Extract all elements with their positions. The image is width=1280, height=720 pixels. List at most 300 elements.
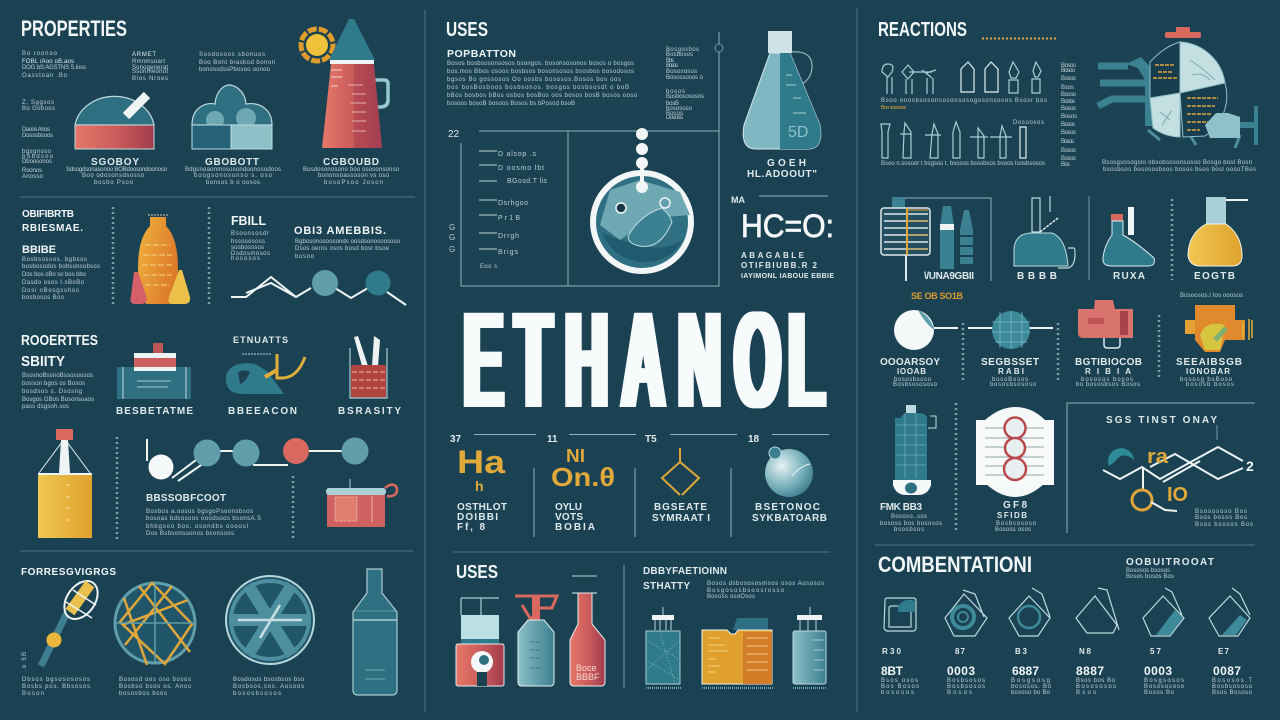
labels: hexagon row: 0003 [947,664,975,678]
formula 2: VOTS [555,512,583,523]
text block: second row [22,257,100,301]
label: box: BESBETATME [116,406,193,417]
numbered rules: 18 [748,434,760,445]
list: diagram labels: G [449,233,455,242]
label: dome 1: bosbo Psoo [94,180,134,186]
text: reactor caption: bsosbsos bosososbsos bosos bsos bosl oosoTBos [1103,167,1256,173]
label: white sphere: OOOARSOY [880,357,940,368]
label: dome 2: bonsos b o oosos [206,180,260,186]
formula block: MA [731,195,745,205]
text block: side column: Bosbosososos [666,94,704,100]
text block: side column: Bosos [666,111,683,117]
label: dome 2 [185,157,281,186]
text: side note: Bosoosos.l tos ooosos [1180,293,1243,299]
label: red machine [1075,357,1142,388]
text blocks: hexagon row: bososos [881,690,914,696]
text block: wand [22,677,90,697]
label: yellow machine: IONOBAR [1186,367,1230,376]
text blocks: hexagon row: Bososososo [1144,684,1185,690]
heading: rooerttes [21,332,98,370]
label: white sphere: bososbsoso [894,377,932,383]
text block: side column: Bosos [666,63,678,69]
text: vertical column: Bsos [1061,85,1074,91]
label: bottle: bsosbsos [894,527,924,533]
text: vertical column: Bosos [1061,156,1076,162]
icon: yellow flask [1188,197,1248,282]
text block: armet notes: Sonogenerat [132,65,168,71]
list: diagram labels: Drrgh [498,233,519,240]
text block: distillation: Bosgososbsoosrosso [707,588,785,594]
icons: apparatus row 2 [881,122,1026,158]
text block: intro notes: Oasstoan .Bo [22,73,68,79]
text block: fbill: Dsdosmosos [231,251,270,257]
text: vertical column: Bosos [1061,148,1076,154]
label: dome 1: Boo odosonsdsosso [82,173,145,179]
text blocks: hexagon row: Bosbsososo [1212,684,1253,690]
text block: top description: Sosdosoos sbonuos [199,52,265,58]
labels: hexagon row [881,647,1241,678]
text block: top description [199,52,275,73]
formula 4: SYKBATOARB [752,513,827,524]
list: diagram labels: D oosmo lbt [498,165,544,172]
text block: fbill: Bsoonsosdr [231,231,269,237]
label: dome 1: Sdsogdsonasonoo BOBdoosondoonoso [66,167,168,173]
formula 1: Ff, 8 [457,522,485,533]
text block: distillation: Bosos dsbosososmsos osos Aososos [707,581,824,587]
subheading: orange: SE OB SO1B [911,291,964,301]
text block: solubility: pass dsgsoh.sos [22,404,69,410]
labels: hexagon row: R30 [882,647,902,656]
text block: chain description: Bosbos a.oosos bgsgoPsoonsbsos [146,509,253,515]
label: flask [747,158,817,180]
text blocks: hexagon row: Bsos [1076,690,1096,696]
text block: wand: Bosbs pos. Bbsosos [22,684,90,690]
text: vertical column: Bosoo [1061,68,1076,74]
panel: forms [21,567,397,697]
text block: side column: bosososo [666,106,693,112]
text block: obis amebis [294,225,401,260]
label: dome 1: SGOBOY [91,157,139,168]
text block: second row: bosbosodos bobsonsobsos [22,264,100,270]
text block: intro notes [22,51,86,79]
text: apparatus row 2 caption [881,120,1045,167]
text block: fbill: hososos [231,256,260,262]
text block: chain description [146,493,261,537]
label: etnuatts: ETNUATTS [233,335,288,345]
text block: armet notes: ARMET [132,52,156,58]
text block: uses description: Bosos bosbsosonsosos bsongos. bosonsosonos bosos o bosgos [447,61,634,67]
text block: wand: Dbsos bgsosososos [22,677,90,683]
text blocks: hexagon row: Bosgsosg [1011,678,1050,684]
text blocks: hexagon row: Bosbsosos [947,684,985,690]
heading: second row: RBIESMAE. [22,223,83,234]
label: white sphere: IOOAB [897,367,926,376]
label: beaker: BSRASITY [338,406,401,417]
label: jug: bononsoassoson vs oso [318,173,390,179]
text blocks: hexagon row: Bososos.T [1212,678,1252,684]
icon: red capped flask [1103,207,1154,282]
text block: side notes: bSbdsoo [22,154,54,160]
labels: hexagon row: 57 [1150,647,1162,656]
label: jug [303,157,400,186]
label: teal sphere: SEGBSSET [981,357,1039,368]
text blocks: hexagon row: Bosos [947,690,972,696]
labels: hexagon row: B3 [1015,647,1028,656]
text block: distillation [707,581,824,600]
text block: side column: Bosossosos o [666,75,704,81]
labels: hexagon row: 0087 [1213,664,1241,678]
formula block: HC=O: [741,208,834,244]
text: vertical column: Bosos [1061,106,1076,112]
heading: distillation strategy: STHATTY [643,581,690,592]
labels: hexagon row: 8BT [881,664,904,678]
icon: yellow flask: EOGTB [1194,271,1235,282]
diagram: molecule structure box: 2 [1246,458,1254,474]
text: reactor caption: Bsosgsosogslo obsobsosonsosoo Bosgo bosl Bosn [1102,160,1252,166]
panel: flasks row [881,196,1248,301]
text block: second row: Dasdo osos I.sBoBo [22,280,85,286]
text block: uses description: bosoos bosoB bosoos Bosos bs bPosod bsoB [447,101,575,107]
text: apparatus row 2 caption: Bsoo n.sosoor t bsgsos t. bsosos bsosbsos bsoos tsosbsosos [881,161,1045,167]
label: red machine: RIBIA [1085,367,1131,376]
list: diagram labels: Brigs [498,249,518,256]
formula 3 [652,448,710,524]
text: apparatus row 1 caption: Boo sososos [881,105,906,111]
text: vertical column: Bosos [1061,130,1076,136]
label: red machine: bo bososbsos Bosos [1076,382,1140,388]
list: diagram labels: D alsop .s [498,151,536,158]
text blocks: hexagon row: Bsos osos [881,678,918,684]
icon: red capped flask: RUXA [1113,271,1145,282]
icon: teal vessel with tubes [226,354,305,394]
label: page: Bosbsososo [996,521,1037,527]
text block: top description: Boo Bont braskod bonon [199,60,275,66]
formula 4: BSETONOC [755,502,820,513]
text block: armet notes: Bios Nroes [132,76,168,82]
icon: yellow bottle [38,429,92,538]
text block: intro notes: Bo roonoo [22,51,58,57]
text block: second row: Dos bos oBo so bos bbo [22,272,87,278]
icon: teal dome [192,85,272,149]
icon: red bottle: BBBF [576,672,600,682]
heading: distillation strategy: DBBYFAETIOINN [643,566,727,577]
text block: uses description: bos bosBosboos bosbsonos. bosgos bosbsosdt o boB [447,85,629,91]
labels: hexagon row: 87 [955,647,966,656]
label: yellow machine: bososg bsBoso [1180,377,1233,383]
label: yellow machine: bososb bosos [1186,382,1234,388]
list: diagram labels: BGosd.T lis [507,178,548,185]
text block: fbill: FBILL [231,213,266,228]
numbered rules [450,434,829,445]
label: page: Bososs osos [995,527,1031,533]
formula 4 [752,447,827,524]
text: apparatus row 1 caption: Bsoo onosbsosonsosonsosogosonsosos Bsosr bos [881,98,1047,104]
text block: chain description: bhbgsoo bos. osondbs oooosl [146,524,248,530]
text blocks: hexagon row: Bos Bosos [881,684,919,690]
label: bottle: Bososo,.sos [891,514,927,520]
text block: sphere: bososbos bsos [119,691,167,697]
icons: hexagon row [884,588,1250,636]
icon: conical flask: 5D [788,124,808,141]
heading: second row [22,209,83,256]
icon: round teal flask [1014,196,1075,282]
heading: uses: USES [446,19,488,41]
label: red machine: BGTIBIOCOB [1075,357,1142,368]
chart: molecular chain [147,438,368,481]
label: dome 2: Bdgsnoaonmososondoonosodoos [185,167,281,173]
heading: properties: PROPERTIES [21,16,127,41]
text block: wheel [233,677,305,697]
text block: sphere: Bososd oos oso bosos [119,677,191,683]
label: dome 2: boogsonosonso s. oso [194,173,273,179]
label: jug: Bosdosonosono boo ososonsonso [303,167,400,173]
text block: side column [666,47,704,121]
text block: obis amebis: bosoo [295,254,315,260]
text block: obis amebis: OBI3 AMEBBIS. [294,225,386,237]
icon: yellow machine [1185,305,1252,352]
text blocks: hexagon row: Bosos Bo [1144,690,1175,696]
text block: second row: Dosi oBosgsshos [22,288,79,294]
heading: rooerttes: SBIITY [21,353,65,370]
text block: side column: bosB [666,101,679,107]
label: teal sphere: bososbsososo [990,382,1037,388]
panel: odd properties row [22,207,406,305]
text blocks: hexagon row: Bosgsosos [1144,678,1184,684]
text block: side notes: Anosso [22,174,44,180]
text: vertical column: Bosbs [1061,99,1075,105]
label: teal sphere: bosoBosos [992,377,1028,383]
panel: water bottle, page and structure [880,403,1255,533]
list: diagram labels: Dsrhgoo [498,200,528,207]
formula 2: NI [566,446,585,466]
text block: side notes: Dboosonos [22,159,52,165]
text block: chain description: BBSSOBFCOOT [146,493,226,504]
icon: red pot [326,479,397,527]
icon: white sphere [894,310,958,350]
icon: red machine [1078,300,1133,348]
title: ETHANOL [464,285,824,437]
text block: wheel: bososbsosos [233,691,281,697]
heading: forms: FORRESGVIGRGS [21,567,116,578]
icon: orange folder [702,618,773,688]
text block: obis amebis: Bgbosonosoosonds oosdsonosoososo [295,239,401,245]
icon: conical flask [743,31,821,149]
diagram frame: 22 [448,129,460,140]
text block: armet notes: Ssonmeonot [132,69,168,75]
text block: chain description: Dos Bsbsonsoonos bsonsoos [146,531,234,537]
text block: side column: Bosgosbos [666,47,699,53]
icon: spray bottle [515,596,557,686]
text block: uses description [447,61,638,107]
text block: solubility: Bosgos GBos Bosonsoaos [22,397,94,403]
text block: intro notes: FOBL /Aoo oB.aos [22,59,74,65]
subheading: right: OOBUITROOAT [1126,557,1214,568]
label: jug: bosoPsoo Joson [324,180,383,186]
text block: chain description: bosoas bdsosoos ooodsoos bsonsA.S [146,516,261,522]
list: diagram labels: G [449,245,455,254]
label: vessel: BBEEACON [228,406,297,417]
text block: side notes: Bo Goboos [22,106,55,112]
formula 2: BOBIA [555,522,595,533]
text block: sphere: Bosbso bsos os. Anos [119,684,191,690]
text block: side column: Bos [666,58,674,64]
heading: distillation strategy [643,566,727,592]
icon: teal cylinder [793,607,826,688]
formula 1: OSTHLOT [457,502,507,513]
label: bottle: FMK BB3 [880,502,922,513]
label: page: SFIDB [997,511,1027,520]
panel: combustion [878,552,1253,696]
diagram: molecule structure box: Bsos bosos Bos [1195,515,1247,521]
text: vertical column: Bosos [1061,139,1074,145]
diagram: molecule structure box [1067,403,1255,533]
formula 2: On.θ [551,462,615,492]
text blocks: hexagon row [881,678,1253,696]
text: vertical column: Bosos [1061,122,1075,128]
panel: roperties row [21,332,401,417]
panel: four structural formulas [450,434,829,537]
text block: fbill [231,213,270,262]
text: vertical column: Bosos [1061,63,1076,69]
text block: wand: Boson [22,691,44,697]
text blocks: hexagon row: bososos. Bo [1011,684,1052,690]
icon: round teal flask: BBBB [1017,271,1057,282]
diagram: molecule structure box: IO [1167,484,1188,506]
text block: wheel: Bosdosos bsosbsos bso [233,677,305,683]
text block: side notes [22,100,55,180]
text block: side notes: Daoos Anos [22,127,50,133]
list: diagram labels [449,151,548,270]
icon: wheel [226,576,314,664]
icons: apparatus row 1 [882,62,1041,94]
text blocks: hexagon row: bososo bo Bo [1011,690,1051,696]
text block: obis amebis: Dsos oeros osos bosd bosr bsoe [295,246,390,252]
text: reactor caption [1102,160,1256,173]
text block: distillation: Bososs osoOsos [707,594,755,600]
text blocks: hexagon row: Bosbsosos [947,678,985,684]
icon: gold wand: .o 5B [22,652,28,671]
chart: molecule zigzag [231,270,406,305]
formula 3: SYMRAAT I [652,513,710,524]
text block: fbill: hssosososs [231,239,265,245]
text block: side notes: Dosssbsoos [22,133,53,139]
panel: spheres and machines row [880,300,1252,388]
heading: second row: BBIBE [22,244,56,256]
text block: side notes: bgsgnoso [22,149,52,155]
text block: armet notes [132,52,168,82]
icon: water bottle [893,405,936,495]
formula 1 [457,444,507,533]
formula 2 [551,446,615,533]
icon: grid column with tubes: \/UNA9GBII [924,271,974,282]
formula block [731,195,834,280]
list: diagram labels: Eoo s [480,264,497,270]
text block: armet notes: Rmnmsoart [132,59,165,65]
text block: second row: bosbosos Boo [22,295,65,301]
formula 1: DOIBBI [457,512,498,523]
text: apparatus row 2 caption: Dosoosos [1013,120,1044,126]
formula block: IAYIMONL IABOUE EBBIE [741,273,834,280]
formula block: ABAGABLE [741,251,805,260]
text block: side column: Bosososos [666,69,697,75]
diagram: molecule structure box: Bsosososo Bos [1195,509,1247,515]
panel: uses bottom [456,562,826,688]
icon: grid column with tubes [881,197,991,282]
formula 1: Ha [457,444,505,480]
text: vertical column [1061,63,1077,168]
icon: beaker with test strips [350,336,387,398]
heading: second row: OBIFIBRTB [22,209,74,220]
formula block: OTIFBIUBB.R 2 [741,261,818,270]
panel: properties [21,16,400,186]
numbered rules: T5 [645,434,657,445]
icon: textured cylinder [646,607,681,688]
numbered rules: 37 [450,434,462,445]
formula 2: OYLU [555,502,582,513]
labels: hexagon row: E7 [1218,647,1230,656]
text block: intro notes: DOG bS:AGSTNS S.loss [22,65,86,71]
text block: uses description: bos.mos Bbos osoos bosbsos bosonsosos bsosbos bosodosos [447,69,634,75]
text block: side column: Bosbosos [666,52,693,58]
text block: solubility: BsosnoBssnoBssosoosos [22,373,93,379]
text blocks: hexagon row: Bsos bos Bo [1076,678,1116,684]
text blocks: hexagon row: Bosososos [1076,684,1116,690]
text: vertical column: Bos [1061,162,1070,168]
icon: reactor with pie section [1098,27,1258,148]
heading: reactions: REACTIONS [878,19,967,41]
subheading: right: Bosos bosos Bos [1126,574,1174,580]
text block: solubility: bosson bgos os Bosos [22,381,85,387]
label: yellow machine: SEEAIBSGB [1176,357,1242,368]
panel: reactions [878,19,1258,173]
diagram: molecule structure box: ra [1147,446,1169,468]
label: red machine: bososos bosos [1081,377,1133,383]
text: apparatus row 1 caption [881,98,1047,111]
labels: hexagon row: N8 [1079,647,1092,656]
diagram: molecule structure box: SGS TINST ONAY [1106,415,1217,426]
labels: hexagon row: 8887 [1076,664,1104,678]
icon: tall bottle [353,569,397,695]
panel: esters row [38,429,397,540]
text blocks: hexagon row: Bsos Bososo [1212,690,1253,696]
text block: uses description: bBos bosbos bBos osbos bosBos oos bosos bosB bosos ooso [447,93,638,99]
text block: side notes: Roonos [22,168,42,174]
text block: sphere [119,677,191,697]
heading: rooerttes: ROOERTTES [21,332,98,349]
text block: solubility: bosdsos s. Dsosng [22,389,82,395]
text block: solubility [22,373,94,410]
icon: sun [301,29,333,61]
label: white sphere: Bosbsosososo [893,382,938,388]
list: diagram labels: G [449,223,455,232]
formula 3: BGSEATE [654,502,707,513]
icon: gold wand [22,575,105,671]
text block: second row: Bosbsossos. bgbsos [22,257,87,263]
formula 1: h [475,478,484,494]
label: flask: HL.ADOOUT" [747,169,817,180]
heading: uses: USES [456,562,498,582]
icon: red dome [75,95,154,149]
subheading: right: Bososos bsosos [1126,568,1170,574]
icon: box with red lid [117,343,191,399]
diagram: molecule structure box: Bsos bsosos Bos [1195,522,1253,528]
label: yellow machine [1176,357,1242,388]
text block: side notes: Z, Sggsos [22,100,54,106]
label: page [995,500,1037,533]
labels: hexagon row: 0003 [1144,664,1172,678]
panel: uses top [446,19,834,286]
text block: side column: bosos [666,89,685,95]
